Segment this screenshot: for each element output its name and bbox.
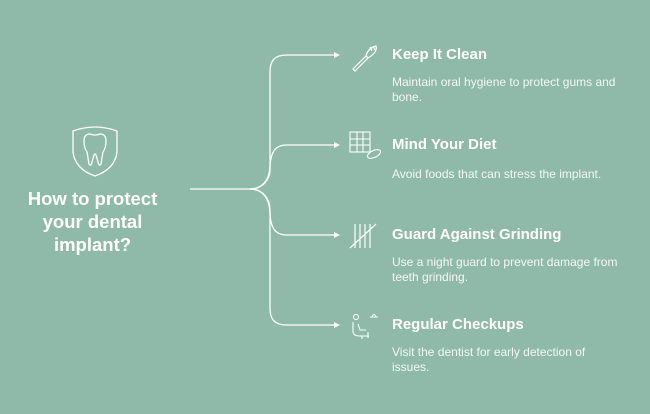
icon: diet grid	[349, 131, 382, 159]
heading: Guard Against Grinding	[392, 226, 561, 243]
heading: Regular Checkups	[392, 316, 524, 333]
item 2	[349, 131, 601, 181]
title: How to protect your dental implant?	[28, 188, 157, 255]
icon: shield tooth	[72, 126, 118, 177]
item 1	[352, 45, 615, 104]
icon: dental chair	[352, 314, 378, 339]
text: Avoid foods that can stress the implant.	[392, 167, 601, 181]
icon: tally marks	[350, 224, 376, 248]
item 4	[352, 314, 586, 374]
heading: Mind Your Diet	[392, 136, 496, 153]
icon: toothbrush	[352, 45, 377, 72]
text: Use a night guard to prevent damage from teeth grinding.	[392, 255, 617, 284]
text: Visit the dentist for early detection of issues.	[392, 345, 585, 374]
item 3	[350, 224, 617, 284]
text: Maintain oral hygiene to protect gums and bone.	[392, 75, 615, 104]
heading: Keep It Clean	[392, 46, 487, 63]
